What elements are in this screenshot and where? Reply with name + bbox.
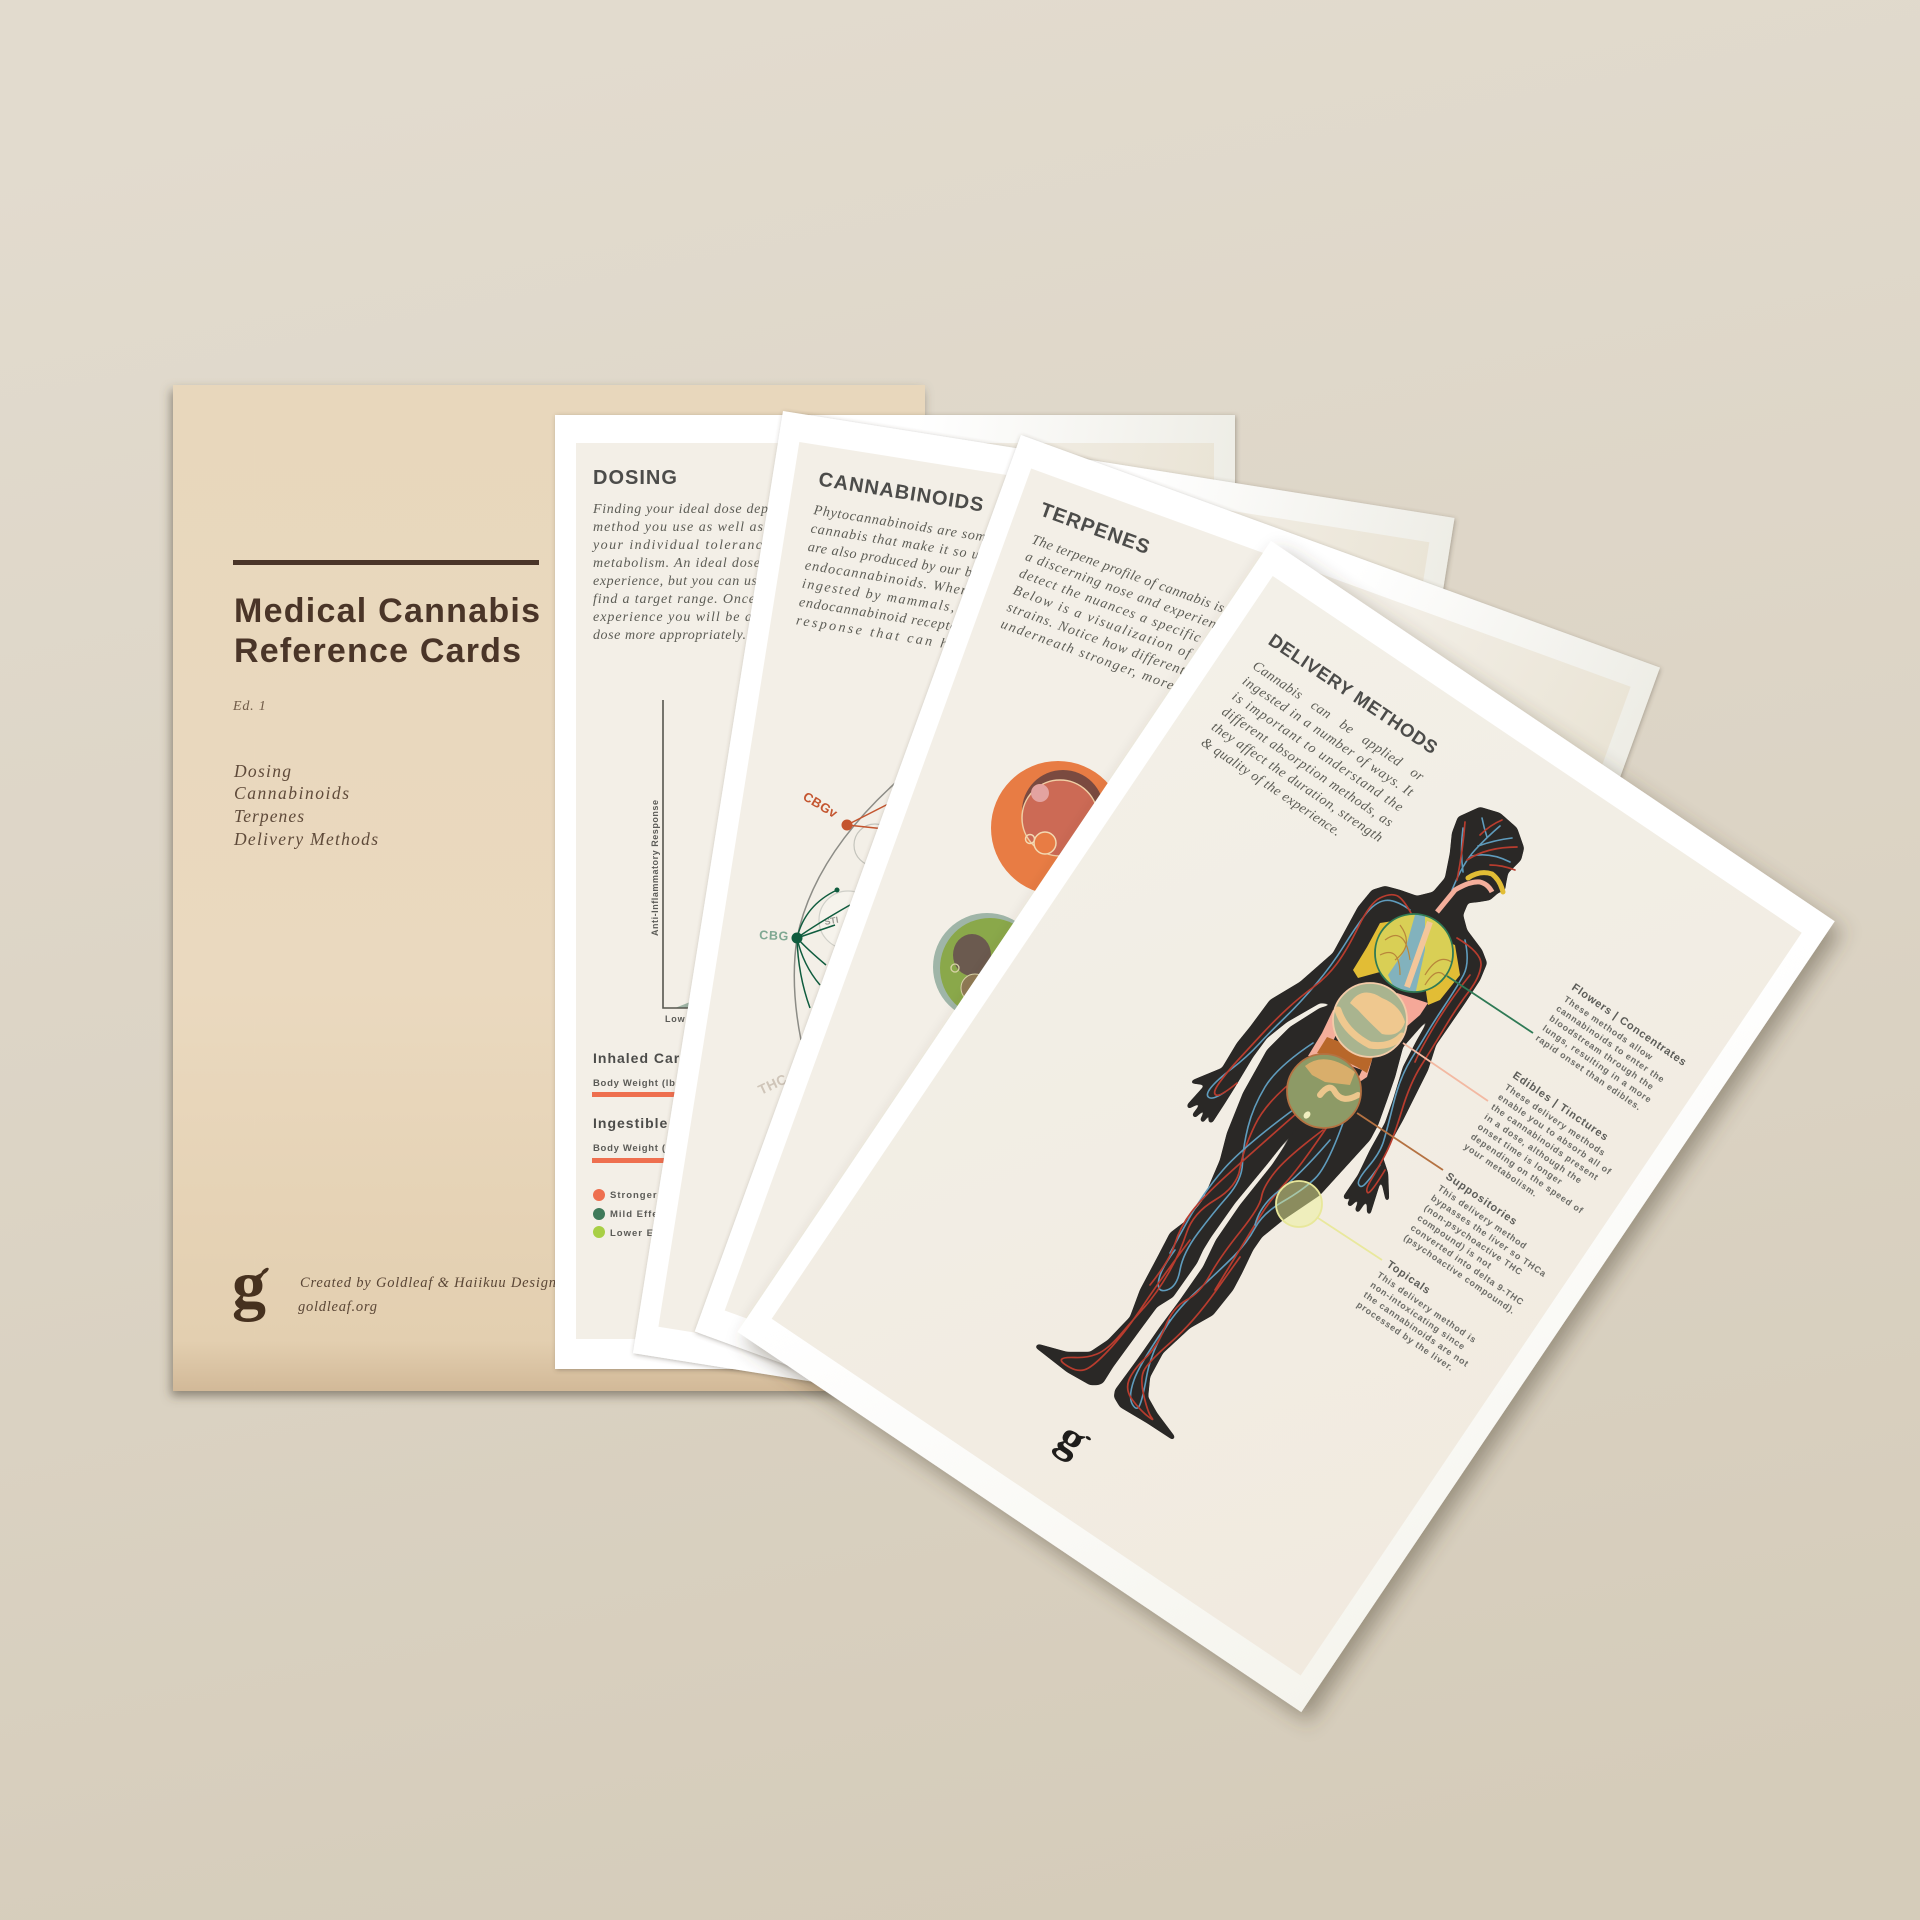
circle: suppositories <box>1287 1054 1361 1128</box>
cannabinoids chart <box>756 770 910 1098</box>
terpenes text: a discerning nose and experien <box>1023 549 1218 633</box>
inhaled bar: Inhaled Car <box>593 1050 680 1066</box>
delivery text: different absorption methods, as <box>1219 705 1396 831</box>
dosing chart <box>650 700 735 1024</box>
envelope rule <box>233 560 539 565</box>
delivery text: & quality of the experience. <box>1198 735 1343 840</box>
credit: Created by Goldleaf & Haiikuu Design <box>300 1275 556 1291</box>
panel: dosing card <box>555 415 1235 1369</box>
cannabinoids text: endocannabinoid recepto <box>798 595 958 635</box>
cannabinoids heading: CANNABINOIDS <box>817 469 986 517</box>
circle: edibles and tinctures <box>1333 983 1407 1057</box>
dosing text: dose more appropriately. <box>593 628 746 643</box>
ingestible bar <box>592 1115 722 1163</box>
delivery text: Cannabis can be applied or <box>1249 659 1427 785</box>
edition: Ed. 1 <box>232 699 267 714</box>
callout: suppositories <box>1357 1113 1564 1319</box>
contents list: Dosing <box>233 761 291 781</box>
inhaled bar <box>592 1050 722 1097</box>
dosing text: experience, but you can us <box>593 574 758 589</box>
callout: edibles and tinctures: the cannabinoids present <box>1489 1102 1601 1183</box>
envelope title: Medical Cannabis <box>234 592 540 630</box>
envelope title <box>234 592 540 670</box>
dosing heading: DOSING <box>593 467 678 489</box>
contents list <box>233 761 378 849</box>
callout: flowers and concentrates: cannabinoids to enter the <box>1554 1003 1667 1085</box>
terpene spheres <box>933 761 1125 1021</box>
inhaled bar: Body Weight (lbs <box>593 1078 682 1089</box>
callout: suppositories: (psychoactive compound). <box>1402 1232 1517 1316</box>
dosing text: your individual toleranc <box>591 538 763 553</box>
callout: suppositories: This delivery method <box>1436 1183 1529 1251</box>
terpenes text: detect the nuances a specific <box>1017 566 1203 646</box>
delivery text: they affect the duration, strength <box>1208 720 1385 846</box>
callout: topicals: Topicals <box>1384 1259 1433 1297</box>
callout: topicals: processed by the liver. <box>1355 1299 1456 1373</box>
contents list: Delivery Methods <box>233 829 378 849</box>
legend: Lower Effects <box>610 1228 685 1239</box>
callout: edibles and tinctures: in a dose, although the <box>1483 1112 1584 1186</box>
ingestible bar: Ingestible <box>593 1115 668 1131</box>
terpenes text: Below is a visualization of <box>1011 583 1195 662</box>
circle: flowers and concentrates <box>1375 914 1455 995</box>
terpenes text <box>999 532 1227 701</box>
figure: human body with circulatory system <box>1035 807 1524 1440</box>
logo: envelope g: g <box>232 1246 266 1322</box>
callout: flowers and concentrates: lungs, resulting in a more <box>1541 1023 1654 1105</box>
terpenes text: The terpene profile of cannabis is <box>1029 532 1227 617</box>
cannabinoids text: cannabis that make it so u <box>810 522 980 563</box>
cannabinoids text: response that can h <box>795 613 948 652</box>
organs: lungs, stomach, bowel and airway <box>1308 873 1503 1085</box>
legend: Mild Effects <box>610 1209 675 1220</box>
credit <box>298 1275 556 1315</box>
callout: suppositories: compound) is not <box>1416 1213 1494 1271</box>
dosing chart: Low <box>665 1014 686 1024</box>
dosing text: metabolism. An ideal dose <box>593 556 760 571</box>
callout: flowers and concentrates: bloodstream through the <box>1548 1013 1656 1092</box>
callout: edibles and tinctures: enable you to absorb all of <box>1496 1092 1614 1177</box>
dosing text: method you use as well as <box>593 520 764 535</box>
dosing text: experience you will be a <box>593 610 752 625</box>
callout: suppositories: (non-psychoactive THC <box>1422 1203 1525 1277</box>
callout: flowers and concentrates: These methods allow <box>1562 994 1655 1062</box>
legend <box>593 1189 685 1239</box>
delivery text: ingested in a number of ways. It <box>1239 674 1417 801</box>
callout: edibles and tinctures: These delivery methods <box>1503 1082 1608 1158</box>
panel: cannabinoids card <box>633 411 1455 1460</box>
cannabinoids text: are also produced by our b <box>807 540 973 581</box>
callout: suppositories: converted into delta 9-THC <box>1409 1223 1526 1307</box>
orange sphere <box>991 761 1125 895</box>
logo: delivery card g: g <box>1049 1410 1097 1466</box>
cannabinoids chart: THC <box>756 1070 790 1098</box>
delivery text: is important to understand the <box>1229 689 1406 815</box>
callout: topicals: non-intoxicating since <box>1368 1280 1467 1352</box>
callout: flowers and concentrates: Flowers | Concentrates <box>1569 982 1689 1069</box>
contents list: Terpenes <box>234 806 304 826</box>
panel: delivery methods card <box>738 541 1835 1712</box>
callout: edibles and tinctures: depending on the speed of <box>1469 1131 1586 1216</box>
cannabinoids chart: CBGv <box>800 789 841 821</box>
callout: edibles and tinctures: Edibles | Tinctures <box>1510 1070 1611 1144</box>
callout: edibles and tinctures: onset time is longer <box>1476 1122 1565 1187</box>
legend: Stronger Eff <box>610 1190 677 1201</box>
cannabinoids text <box>794 503 987 656</box>
credit: goldleaf.org <box>298 1299 377 1315</box>
dosing text: find a target range. Once <box>593 592 755 607</box>
callout: edibles and tinctures <box>1403 1043 1629 1226</box>
veins <box>1061 818 1517 1419</box>
dosing text: Finding your ideal dose dep <box>592 502 768 517</box>
callout: suppositories: Suppositories <box>1443 1171 1520 1228</box>
contents list: Cannabinoids <box>234 783 349 803</box>
callout: edibles and tinctures: your metabolism. <box>1462 1141 1540 1199</box>
cannabinoids chart: CBG <box>759 928 789 944</box>
callout: topicals <box>1318 1218 1493 1379</box>
callout: topicals: the cannabinoids are not <box>1362 1290 1471 1369</box>
cannabinoids chart: STI <box>824 915 839 927</box>
terpenes heading: TERPENES <box>1037 499 1153 559</box>
callout: flowers and concentrates: rapid onset than edibles. <box>1534 1033 1643 1113</box>
envelope title: Reference Cards <box>234 632 521 670</box>
terpenes text: underneath stronger, more <box>999 617 1176 694</box>
delivery text <box>1198 659 1427 862</box>
delivery heading: DELIVERY METHODS <box>1265 629 1442 758</box>
cannabinoids text: Phytocannabinoids are som <box>812 503 987 545</box>
panel: envelope <box>173 385 925 1391</box>
dosing text <box>591 502 768 643</box>
green sphere <box>933 913 1041 1021</box>
cannabinoids text: ingested by mammals, t <box>801 577 967 618</box>
circle: topicals <box>1276 1181 1322 1227</box>
cannabinoids text: endocannabinoids. When <box>804 558 969 599</box>
ingestible bar: Body Weight (lbs <box>593 1143 682 1154</box>
callout: suppositories: bypasses the liver so THCa <box>1429 1193 1549 1279</box>
terpenes text: strains. Notice how different <box>1005 600 1188 679</box>
panel: terpenes card <box>695 435 1660 1564</box>
silhouette <box>1035 807 1524 1440</box>
dosing chart: Anti-Inflammatory Response <box>650 800 660 936</box>
callout: flowers and concentrates <box>1447 976 1689 1119</box>
callout: topicals: This delivery method is <box>1375 1270 1479 1345</box>
